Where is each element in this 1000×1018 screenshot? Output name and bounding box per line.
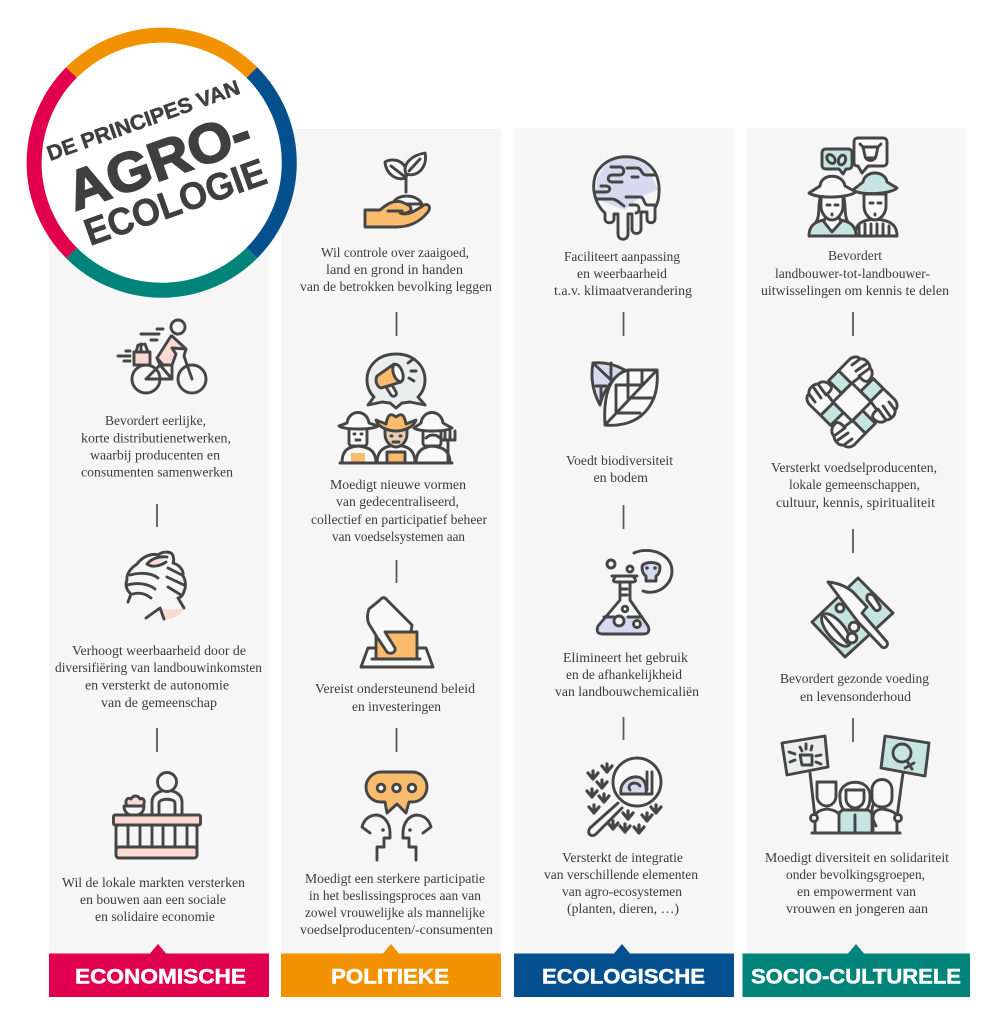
text: bevordert eerlijke: waarbij producenten en <box>90 448 220 462</box>
banner: socio-culturele <box>742 944 970 997</box>
banner: politieke: POLITIEKE <box>331 966 449 988</box>
text: faciliteert aanpassing <box>554 249 692 298</box>
text: wil de lokale markten: en bouwen aan een sociale <box>80 892 226 907</box>
text: moedigt diversiteit <box>765 850 949 916</box>
farmer left <box>342 446 376 463</box>
icon: four interlocked hands <box>807 357 897 447</box>
text: versterkt de integratie <box>544 850 698 916</box>
text: elimineert het gebruik: Elimineert het gebruik <box>563 650 688 665</box>
text: voedt biodiversiteit <box>566 453 673 485</box>
text: moedigt diversiteit: vrouwen en jongeren aan <box>786 901 928 916</box>
text: bevordert eerlijke: korte distributienetwerken, <box>81 430 231 446</box>
banner: socio-culturele: SOCIO-CULTURELE <box>751 966 961 988</box>
text: versterkt voedselproducenten: Versterkt voedselproducenten, <box>771 460 937 475</box>
icon: handshake <box>126 552 185 619</box>
text: versterkt voedselproducenten: cultuur, kennis, spiritualiteit <box>776 495 935 510</box>
text: moedigt diversiteit: Moedigt diversiteit en solidariteit <box>765 850 949 865</box>
left farmer <box>809 219 856 236</box>
icon: hand holding seedling <box>365 153 429 227</box>
text: bevordert gezonde voeding <box>780 671 929 704</box>
text: voedt biodiversiteit: Voedt biodiversiteit <box>566 453 673 468</box>
text: moedigt nieuwe vormen: Moedigt nieuwe vormen <box>330 477 466 492</box>
text: faciliteert aanpassing: Faciliteert aanpassing <box>564 249 680 264</box>
text: elimineert het gebruik: van landbouwchemicaliën <box>555 684 699 699</box>
icon: leaves <box>592 363 657 425</box>
panel: socio-culturele <box>742 128 970 997</box>
right farmer <box>855 219 897 236</box>
icon: market stall <box>114 772 200 858</box>
text: moedigt diversiteit: onder bevolkingsgroepen, <box>786 867 925 882</box>
text: verhoogt weerbaarheid: van de gemeenschap <box>101 695 217 710</box>
icon: melting globe <box>594 157 659 239</box>
text: vereist ondersteunend beleid: en investeringen <box>352 699 441 714</box>
text: verhoogt weerbaarheid: Verhoogt weerbaarheid door de <box>72 643 246 658</box>
panel: politieke <box>281 129 501 997</box>
text: moedigt nieuwe vormen <box>311 477 487 544</box>
banner: economische: ECONOMISCHE <box>75 966 246 988</box>
text: bevordert gezonde voeding: Bevordert gezonde voeding <box>780 671 929 686</box>
text: bevordert landbouwer-tot-landbouwer: landbouwer-tot-landbouwer- <box>775 266 930 281</box>
icon: megaphone and three farmers <box>339 354 455 463</box>
title text: DE PRINCIPES VAN <box>44 76 243 166</box>
panel: ecologische <box>514 128 734 997</box>
title text: ECOLOGIE <box>79 151 272 254</box>
icon: protesters with signs <box>782 736 929 833</box>
text: moedigt een sterkere participatie <box>300 871 493 937</box>
icon: ballot box <box>361 598 433 667</box>
icon: cutting board and knife <box>812 578 893 657</box>
text: bevordert gezonde voeding: en levensonderhoud <box>800 689 911 704</box>
icon: two farmers with speech bubbles <box>809 138 897 236</box>
title text: AGRO- <box>58 100 259 222</box>
text: moedigt nieuwe vormen: van voedselsystemen aan <box>332 529 465 544</box>
text: moedigt een sterkere participatie: in het beslissingsproces aan van <box>309 888 481 903</box>
text: elimineert het gebruik: en de afhankelijkheid <box>566 667 682 682</box>
text: wil controle over zaaigoed: Wil controle over zaaigoed, <box>321 245 469 260</box>
text: moedigt een sterkere participatie: Moedigt een sterkere participatie <box>305 871 485 886</box>
text: versterkt de integratie: van agro-ecosystemen <box>562 884 682 899</box>
text: vereist ondersteunend beleid: Vereist ondersteunend beleid <box>315 681 475 696</box>
text: faciliteert aanpassing: en weerbaarheid <box>577 266 667 281</box>
text: bevordert eerlijke: consumenten samenwerken <box>81 464 233 480</box>
text: moedigt een sterkere participatie: voedselproducenten/-consumenten <box>300 922 493 937</box>
text: wil controle over zaaigoed: van de betrokken bevolking leggen <box>300 279 492 294</box>
text: wil de lokale markten: Wil de lokale markten versterken <box>62 875 245 890</box>
icon: magnifier with snail and plants <box>587 758 661 836</box>
text: versterkt de integratie: van verschillende elementen <box>544 867 698 882</box>
text: versterkt voedselproducenten <box>771 460 937 510</box>
text: bevordert eerlijke: Bevordert eerlijke, <box>105 413 206 428</box>
banner: politieke <box>281 944 501 997</box>
text: faciliteert aanpassing: t.a.v. klimaatverandering <box>554 283 692 298</box>
text: wil de lokale markten <box>62 875 245 924</box>
text: versterkt de integratie: (planten, dieren, …) <box>567 901 679 916</box>
text: moedigt diversiteit: en empowerment van <box>797 884 916 899</box>
icon: flask and skull <box>597 550 672 634</box>
banner: ecologische: ECOLOGISCHE <box>542 966 705 988</box>
icon: delivery bicycle <box>118 320 206 393</box>
icon: speech bubble and two heads <box>362 772 431 860</box>
farmer right <box>416 446 450 463</box>
text: bevordert landbouwer-tot-landbouwer: uitwisselingen om kennis te delen <box>761 283 949 298</box>
text: moedigt nieuwe vormen: collectief en participatief beheer <box>311 512 487 527</box>
farmer middle <box>377 445 415 463</box>
text: voedt biodiversiteit: en bodem <box>594 470 648 485</box>
title text <box>44 76 272 254</box>
title badge <box>27 28 297 298</box>
panel: economische <box>49 129 269 997</box>
text: verhoogt weerbaarheid <box>55 643 262 710</box>
text: wil de lokale markten: en solidaire economie <box>95 909 215 924</box>
text: vereist ondersteunend beleid <box>315 681 475 714</box>
text: bevordert eerlijke <box>81 413 233 480</box>
text: moedigt nieuwe vormen: van gedecentraliseerd, <box>336 494 459 509</box>
text: verhoogt weerbaarheid: en versterkt de autonomie <box>85 678 229 692</box>
text: bevordert landbouwer-tot-landbouwer <box>761 248 949 298</box>
text: wil controle over zaaigoed <box>300 245 492 294</box>
text: moedigt een sterkere participatie: zowel vrouwelijke als mannelijke <box>305 905 485 920</box>
text: elimineert het gebruik <box>555 650 699 699</box>
text: versterkt de integratie: Versterkt de integratie <box>562 850 683 865</box>
banner: ecologische <box>514 944 734 997</box>
text: wil controle over zaaigoed: land en grond in handen <box>326 262 463 277</box>
banner: economische <box>49 944 269 997</box>
text: versterkt voedselproducenten: lokale gemeenschappen, <box>789 477 920 492</box>
text: bevordert landbouwer-tot-landbouwer: Bevordert <box>828 248 882 263</box>
text: verhoogt weerbaarheid: diversifiëring van landbouwinkomsten <box>55 660 262 675</box>
